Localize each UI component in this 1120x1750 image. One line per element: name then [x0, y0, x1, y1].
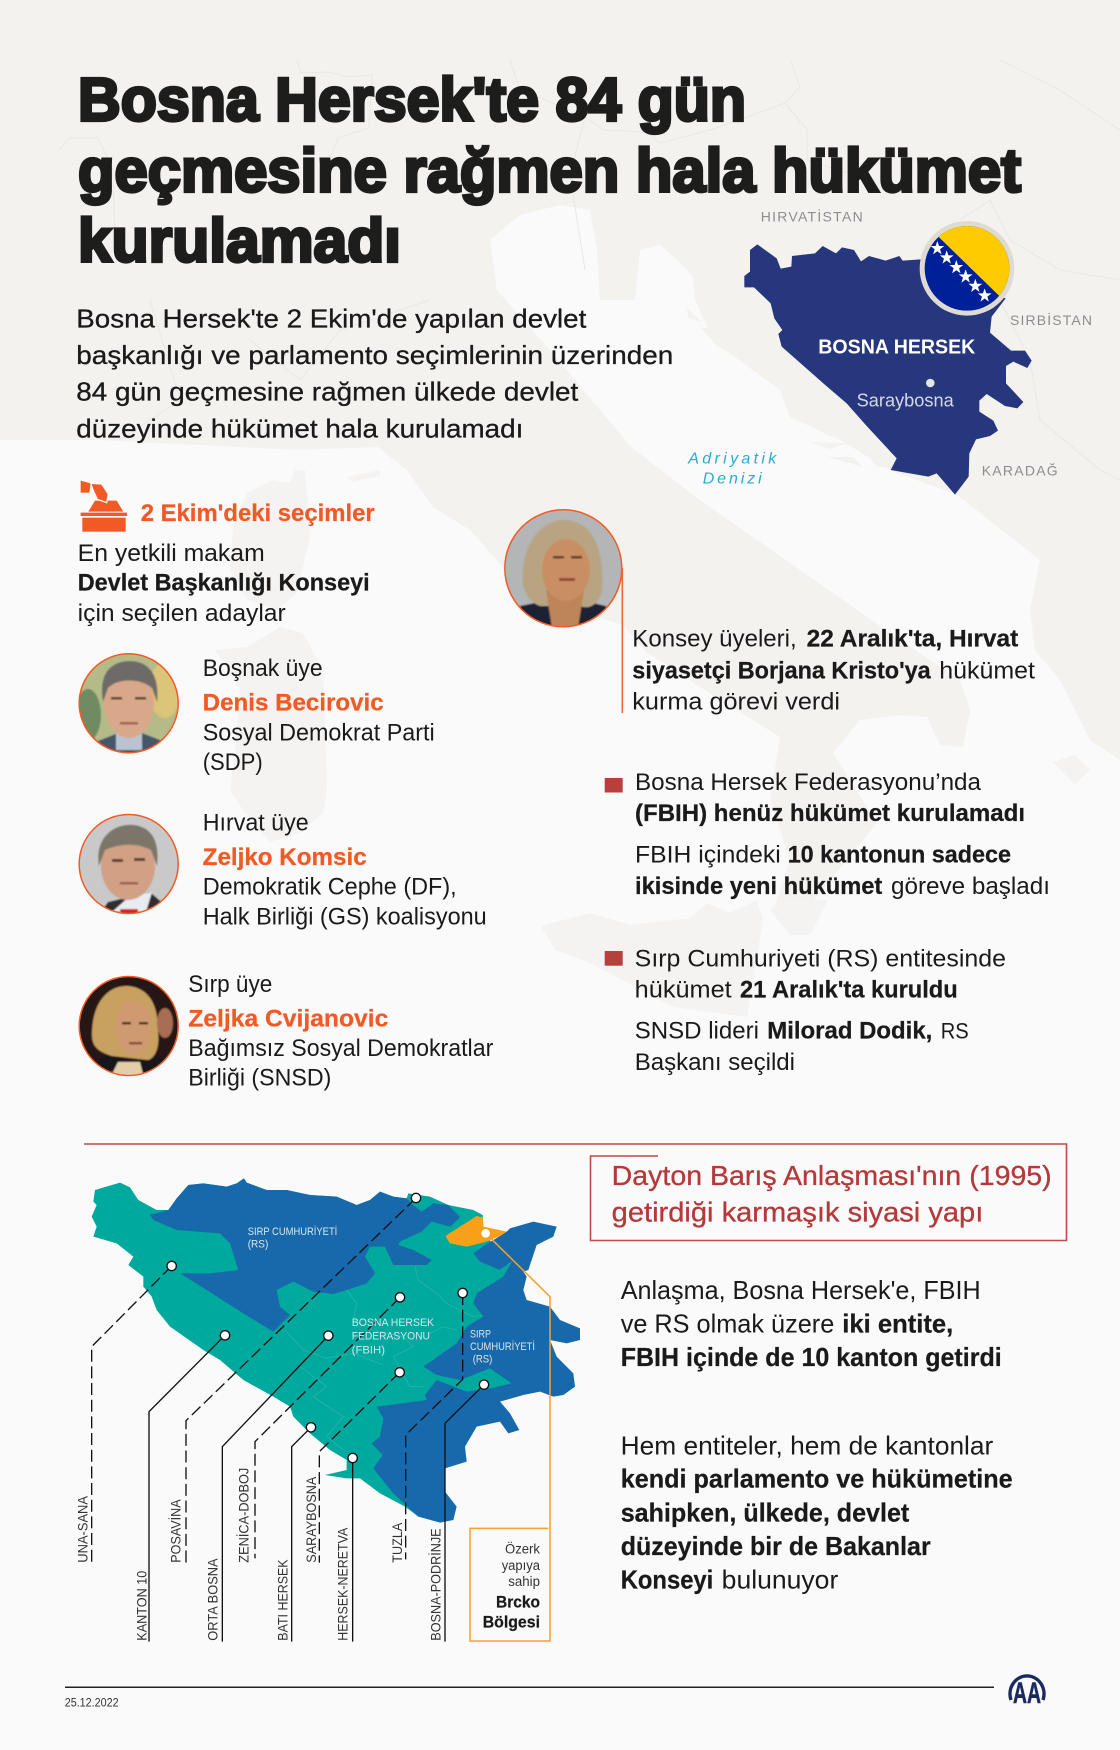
- label: RS north: (RS): [248, 1238, 268, 1250]
- Brcko callout: sahip: [508, 1574, 540, 1589]
- text: RS status: hükümet: [635, 977, 732, 1004]
- member: Zeljka Cvijanovic: [188, 971, 493, 1092]
- text: two entities: iki entite,: [842, 1308, 953, 1338]
- text: parliaments and governments: Hem entiteler, hem de kantonlar: [621, 1430, 994, 1460]
- text: RS status: Başkanı seçildi: [635, 1049, 795, 1076]
- sea label: Denizi: [703, 470, 762, 487]
- label: FBIH: BOSNA HERSEK: [352, 1317, 435, 1329]
- canton labels: TUZLA: [389, 1522, 405, 1563]
- neighbour: Croatia: HIRVATİSTAN: [761, 208, 863, 225]
- canton labels: HERSEK-NERETVA: [334, 1527, 350, 1641]
- Brcko district: [445, 1216, 507, 1247]
- heading: 2 Ekim'deki seçimler: [141, 500, 375, 527]
- sea label: [687, 450, 777, 487]
- text: FBIH status: FBIH içindeki: [635, 842, 781, 869]
- canton labels: SARAYBOSNA: [303, 1476, 319, 1563]
- capital label: Saraybosna: [857, 391, 955, 411]
- text: parliaments and governments: düzeyinde bir de Bakanlar: [621, 1531, 931, 1561]
- text: Kristo mandate: hükümet: [939, 657, 1035, 684]
- sea label: Adriyatik: [687, 450, 777, 467]
- member: Denis Becirovic: Sosyal Demokrat Parti: [203, 720, 435, 747]
- text: Kristo mandate: [632, 626, 1035, 715]
- text: parliaments and governments: sahipken, ülkede, devlet: [621, 1498, 910, 1528]
- capital marker: [926, 379, 935, 387]
- canton labels: BATI HERSEK: [274, 1559, 290, 1641]
- member: Zeljko Komsic: Demokratik Cephe (DF),: [203, 874, 457, 901]
- FBIH enclave: [437, 1368, 512, 1392]
- intro text: [76, 304, 673, 443]
- member: Zeljka Cvijanovic: Sırp üye: [188, 971, 272, 998]
- portrait: Zeljka Cvijanovic: [78, 976, 180, 1085]
- logo: AA: AA: [1013, 1677, 1041, 1710]
- entity and canton map: [74, 1178, 580, 1642]
- portrait: Denis Becirovic: [78, 653, 179, 754]
- text: FBIH status: 10 kantonun sadece: [788, 842, 1011, 869]
- member: Zeljka Cvijanovic: Zeljka Cvijanovic: [188, 1006, 388, 1033]
- text: parliaments and governments: kendi parlamento ve hükümetine: [621, 1464, 1013, 1494]
- label: FBIH: [352, 1317, 435, 1356]
- bullet: [605, 951, 623, 966]
- text: FBIH status: Bosna Hersek Federasyonu’nda: [635, 769, 982, 796]
- text: RS status: 21 Aralık'ta kuruldu: [740, 977, 958, 1004]
- text: Kristo mandate: kurma görevi verdi: [632, 688, 840, 715]
- title: Bosna Hersek'te 84 gün: [78, 66, 746, 134]
- footer rule: [65, 1686, 994, 1688]
- Brcko callout: Özerk: [505, 1541, 540, 1556]
- text: Kristo mandate: Konsey üyeleri,: [632, 626, 797, 653]
- Brcko callout: [483, 1541, 540, 1631]
- text: two entities: ve RS olmak üzere: [621, 1308, 834, 1338]
- locator map: Bosnia and Herzegovina: [687, 208, 1092, 495]
- neighbour: Montenegro: KARADAĞ: [982, 463, 1058, 479]
- Brcko callout: Bölgesi: [483, 1612, 540, 1631]
- label: RS north: [248, 1225, 337, 1250]
- text: parliaments and governments: [621, 1430, 1013, 1594]
- text: FBIH status: [605, 769, 1050, 900]
- text: parliaments and governments: bulunuyor: [722, 1564, 839, 1594]
- member: Zeljko Komsic: Halk Birliği (GS) koalisyonu: [203, 903, 487, 930]
- member: Zeljko Komsic: Hırvat üye: [203, 810, 309, 837]
- date: 25.12.2022: [65, 1698, 119, 1710]
- text: Kristo mandate: siyasetçi Borjana Kristo'ya: [632, 657, 931, 684]
- text: RS status: Milorad Dodik,: [767, 1018, 932, 1045]
- panel: 2 Ekim elections: [78, 481, 375, 627]
- portrait: Borjana Kristo: [505, 510, 623, 713]
- text: RS status: Sırp Cumhuriyeti (RS) entitesinde: [635, 946, 1006, 973]
- label: RS north: SIRP CUMHURİYETİ: [248, 1225, 337, 1238]
- portrait: Zeljko Komsic: [78, 814, 180, 920]
- text: parliaments and governments: Konseyi: [621, 1564, 713, 1594]
- title: kurulamadı: [78, 206, 401, 274]
- canton labels: POSAVİNA: [167, 1499, 184, 1563]
- sub-heading: [78, 540, 370, 627]
- Brcko callout: yapıya: [502, 1558, 540, 1573]
- canton labels: ORTA BOSNA: [204, 1558, 220, 1641]
- member: Denis Becirovic: [203, 655, 435, 776]
- label: RS east: [470, 1329, 535, 1366]
- canton labels: BOSNA-PODRİNJE: [427, 1528, 444, 1641]
- country shape: [744, 244, 1032, 495]
- label: FBIH: FEDERASYONU: [352, 1330, 430, 1342]
- leader lines: [92, 1198, 484, 1642]
- Brcko callout: Brcko: [496, 1592, 540, 1611]
- member: Zeljko Komsic: [203, 810, 487, 930]
- label: RS east: CUMHURİYETİ: [470, 1340, 535, 1353]
- sub-heading: En yetkili makam: [78, 540, 265, 567]
- member: Denis Becirovic: Boşnak üye: [203, 655, 323, 682]
- canton labels: UNA-SANA: [74, 1495, 90, 1563]
- canton labels: ZENİCA-DOBOJ: [235, 1468, 252, 1563]
- logo: AA: [1010, 1676, 1044, 1710]
- FBIH territory: [92, 1178, 512, 1517]
- text: two entities: Anlaşma, Bosna Hersek'e, FBIH: [621, 1275, 981, 1305]
- label: RS east: (RS): [473, 1354, 492, 1366]
- member: Denis Becirovic: Denis Becirovic: [203, 690, 384, 717]
- member: Zeljko Komsic: Zeljko Komsic: [203, 844, 367, 871]
- title: geçmesine rağmen hala hükümet: [78, 136, 1021, 204]
- flag of Bosnia: [920, 220, 1017, 316]
- text: two entities: [621, 1275, 1002, 1372]
- text: RS status: RS: [941, 1019, 969, 1044]
- Brcko leader and box: [470, 1233, 550, 1641]
- member: Zeljka Cvijanovic: Bağımsız Sosyal Demokratlar: [188, 1035, 493, 1062]
- Dayton heading box: getirdiği karmaşık siyasi yapı: [612, 1197, 983, 1228]
- intro text: Bosna Hersek'te 2 Ekim'de yapılan devlet: [76, 304, 587, 334]
- sub-heading: için seçilen adaylar: [78, 600, 286, 627]
- text: FBIH status: ikisinde yeni hükümet: [635, 873, 882, 900]
- RS territory: east and south: [372, 1222, 580, 1523]
- bullet: [605, 778, 623, 792]
- title: [78, 66, 1021, 274]
- text: RS status: SNSD lideri: [635, 1018, 759, 1045]
- canton borders: [285, 1267, 482, 1450]
- text: FBIH status: göreve başladı: [891, 873, 1050, 900]
- canton labels: KANTON 10: [134, 1571, 150, 1641]
- text: RS status: [605, 946, 1006, 1076]
- neighbour: Serbia: SIRBİSTAN: [1010, 311, 1092, 328]
- intro text: başkanlığı ve parlamento seçimlerinin üzerinden: [76, 340, 673, 370]
- RS territory: north: [150, 1178, 460, 1332]
- sub-heading: Devlet Başkanlığı Konseyi: [78, 570, 370, 597]
- text: two entities: FBIH içinde de 10 kanton getirdi: [621, 1342, 1002, 1372]
- text: Kristo mandate: 22 Aralık'ta, Hırvat: [807, 626, 1018, 653]
- Dayton heading box: Dayton Barış Anlaşması'nın (1995): [612, 1160, 1052, 1191]
- canton labels: [74, 1468, 444, 1641]
- map markers: [167, 1193, 490, 1463]
- map shapes: [92, 1178, 580, 1642]
- icon: ballot box: [81, 481, 127, 532]
- label: FBIH: (FBIH): [352, 1344, 385, 1356]
- label: RS east: SIRP: [470, 1329, 491, 1341]
- member: Zeljka Cvijanovic: Birliği (SNSD): [188, 1065, 331, 1092]
- intro text: düzeyinde hükümet hala kurulamadı: [76, 413, 523, 443]
- intro text: 84 gün geçmesine rağmen ülkede devlet: [76, 377, 579, 407]
- member: Denis Becirovic: (SDP): [203, 749, 263, 776]
- Dayton heading box: [84, 1144, 1066, 1240]
- country label: BOSNA HERSEK: [818, 336, 976, 358]
- text: FBIH status: (FBIH) henüz hükümet kurulamadı: [635, 800, 1025, 827]
